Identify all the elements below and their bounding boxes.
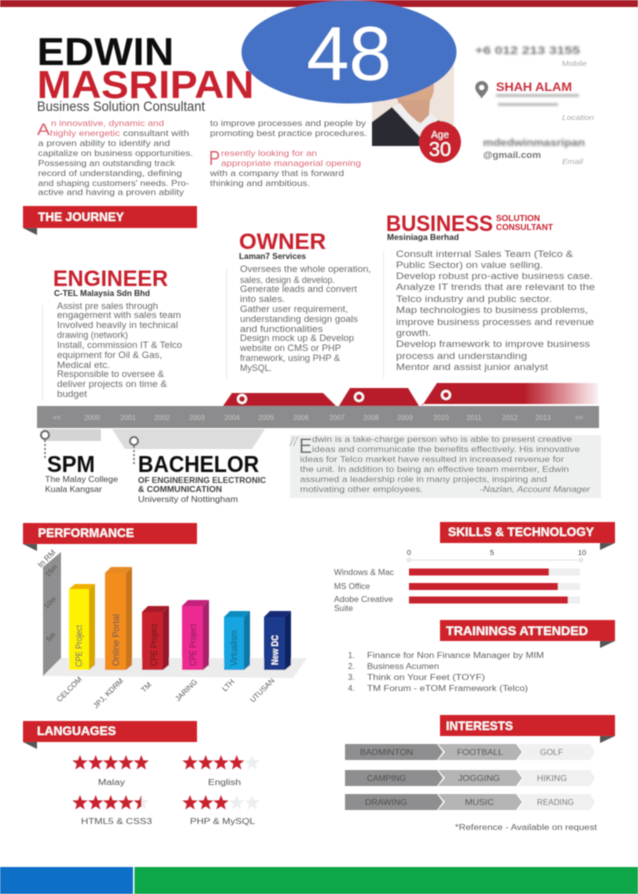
contact: location: SHAH ALAM [496, 80, 572, 94]
interests chevrons row 1: FOOTBALL [457, 747, 503, 757]
education: bachelor [112, 429, 266, 504]
job: owner: Generate leads and convert [240, 284, 358, 294]
age badge: 30 [429, 139, 451, 161]
testimonial quote: // [289, 434, 299, 449]
timeline bar: 2003 [189, 415, 205, 422]
timeline bar: 2004 [224, 415, 240, 422]
intro text column 1: record of understanding, defining [38, 168, 182, 178]
page number badge: 48 [307, 12, 391, 97]
trainings list: TM Forum - eTOM Framework (Telco) [367, 684, 528, 693]
job: business solution consultant: Mesiniaga Berhad [387, 232, 459, 242]
name heading: EDWIN [37, 31, 174, 74]
intro text column 1: and shaping customers' needs. Pro- [38, 178, 189, 188]
skills bar chart [334, 548, 586, 613]
job: business solution consultant: Analyze IT trends that are relevant to the [396, 282, 595, 292]
contact: mobile: Mobile [562, 59, 587, 68]
interests chevrons row 3 [345, 794, 595, 810]
chart category labels: LTH [220, 677, 236, 693]
job: engineer: Responsible to oversee & [57, 369, 164, 379]
testimonial quote [289, 434, 601, 498]
job: owner: framework, using PHP & [240, 353, 340, 363]
name heading [37, 31, 254, 114]
job: owner: MySQL. [240, 363, 272, 373]
timeline bar: 2005 [258, 415, 274, 422]
testimonial quote: motivating other employees. [300, 484, 423, 494]
skills bar chart: MS Office [334, 582, 371, 591]
job: engineer: Medical etc. [57, 360, 110, 370]
rating: malay: Malay [98, 778, 125, 787]
contact: location [496, 80, 594, 122]
age badge [419, 121, 461, 163]
testimonial quote: E [299, 435, 312, 458]
interests chevrons row 2 [345, 770, 595, 786]
interests chevrons row 1 [345, 744, 595, 760]
banner: the journey [23, 206, 197, 235]
chart floor [43, 658, 307, 678]
job: business solution consultant: Telco industry and public sector. [396, 294, 552, 304]
job: engineer: Involved heavily in technical [57, 320, 178, 330]
intro text column 1: Possessing an outstanding track [38, 158, 176, 168]
rating: php and mysql: PHP & MySQL [190, 817, 256, 826]
job: business solution consultant: BUSINESS [386, 211, 493, 236]
skills bar chart: Windows & Mac [334, 568, 394, 577]
testimonial quote: -Nazlan, Account Manager [480, 484, 591, 494]
contact: email: Email [562, 157, 583, 166]
rating: php and mysql [182, 795, 260, 826]
portrait photo [372, 55, 454, 146]
timeline bar: 2013 [535, 415, 551, 422]
banner: trainings attended: TRAININGS ATTENDED [446, 624, 588, 638]
career period markers [223, 383, 598, 406]
banner: interests: INTERESTS [446, 719, 513, 733]
bar: utusan: New DC [270, 635, 280, 665]
bar: celcom [69, 584, 95, 670]
rating: english: English [208, 778, 241, 787]
icon: location pin [475, 81, 488, 98]
trainings list: Finance for Non Finance Manager by MIM [367, 651, 544, 660]
intro text column 1: consultant with [123, 128, 189, 138]
chart axis [36, 548, 61, 676]
education: spm: Kuala Kangsar [45, 484, 102, 494]
intro text column 2 [209, 118, 367, 188]
skills bar chart: 5 [490, 548, 494, 557]
timeline bar: 2006 [293, 415, 309, 422]
job: business solution consultant: process and understanding [396, 351, 527, 361]
trainings list: 1. [348, 651, 355, 660]
interests chevrons row 1: GOLF [540, 747, 563, 757]
timeline bar [37, 406, 599, 428]
bar: lth [224, 611, 250, 670]
rating: english [182, 755, 260, 787]
bar: jaring [182, 600, 209, 670]
job: business solution consultant: CONSULTANT [496, 223, 553, 232]
contact: location: Location [562, 113, 594, 122]
banner: trainings attended [440, 620, 615, 648]
timeline bar: 2008 [363, 415, 379, 422]
job: engineer: engagement with sales team [57, 310, 181, 320]
job: business solution consultant: SOLUTION [496, 214, 540, 223]
job: owner: OWNER [239, 229, 326, 254]
job: engineer: deliver projects on time & [57, 379, 167, 389]
intro text column 1 [37, 118, 193, 197]
bar: jaring: CPE Project [188, 624, 198, 666]
intro text column 1: a proven ability to identify and [38, 138, 170, 148]
job: owner: into sales. [240, 294, 285, 304]
job: business solution consultant: Develop robust pro-active business case. [396, 271, 593, 281]
chart axis: 15m [44, 564, 59, 578]
banner: performance: PERFORMANCE [38, 526, 134, 540]
job: owner: Oversees the whole operation, [240, 264, 371, 274]
trainings list: Think on Your Feet (TOYF) [367, 673, 485, 682]
bar: tm [142, 606, 169, 670]
job: business solution consultant: Mentor and assist junior analyst [396, 362, 549, 372]
banner: skills and technology [440, 522, 615, 550]
education: spm: The Malay College [45, 474, 118, 484]
job: engineer: drawing (network) [57, 330, 128, 340]
testimonial quote: dwin is a take-charge person who is able to present creative [312, 434, 572, 444]
timeline bar: << [53, 415, 61, 422]
bar: lth: Virtualism [229, 630, 239, 666]
contact: email: mdedwinmasripan [483, 138, 585, 149]
skills bar chart: Adobe Creative [334, 595, 394, 604]
interests chevrons row 3: MUSIC [465, 797, 494, 807]
job: owner: Laman7 Services [239, 251, 306, 261]
bar: tm: CPE Project [149, 624, 159, 666]
contact: mobile [475, 45, 587, 68]
contact: mobile: +6 012 213 3155 [475, 45, 580, 57]
job: business solution consultant: Map technologies to business problems, [396, 305, 588, 315]
banner: languages [23, 721, 197, 749]
trainings list: 4. [348, 684, 355, 693]
page number badge [242, 0, 456, 104]
intro text column 1: capitalize on business opportunities. [38, 148, 193, 158]
testimonial quote: the unit. In addition to being an effective team member, Edwin [300, 464, 569, 474]
education: bachelor: University of Nottingham [138, 494, 238, 504]
skills bar chart: Suite [334, 604, 354, 613]
chart category labels: CELCOM [55, 675, 84, 704]
intro text column 1: highly energetic [50, 128, 121, 138]
job: owner: Design mock up & Develop [240, 333, 354, 343]
intro text column 1: active and having a proven ability [38, 187, 185, 197]
job: engineer: budget [57, 389, 88, 399]
age badge: Age [431, 130, 449, 141]
bar: jpj kdrm: Online Portal [111, 614, 121, 666]
trainings list: Business Acumen [367, 662, 439, 671]
job: business solution consultant: growth. [396, 328, 431, 338]
job: business solution consultant: Develop framework to improve business [396, 339, 591, 349]
trainings list [348, 651, 544, 693]
education: spm [41, 429, 118, 494]
job: engineer: C-TEL Malaysia Sdn Bhd [54, 288, 150, 298]
intro text column 2: promoting best practice procedures. [210, 128, 367, 138]
intro text column 2: appropriate managerial opening [221, 158, 361, 168]
chart category labels: JARING [173, 677, 199, 703]
chart category labels [55, 675, 276, 710]
chart axis: 5m [45, 631, 57, 643]
intro text column 2: thinking and ambitious. [210, 178, 310, 188]
interests chevrons row 3: DRAWING [365, 797, 407, 807]
interests chevrons row 2: HIKING [537, 773, 567, 783]
skills bar chart: 0 [407, 548, 411, 557]
chart axis: 10m [43, 596, 58, 610]
job: owner [226, 229, 371, 380]
rating: malay [72, 755, 149, 787]
intro text column 1: A [37, 120, 51, 139]
job: engineer: Install, commission IT & Telco [57, 340, 182, 350]
banner: languages: LANGUAGES [37, 724, 116, 738]
bar chart: performance [36, 548, 307, 710]
intro text column 2: with a company that is forward [209, 168, 344, 178]
contact: email [483, 138, 585, 166]
name heading: Business Solution Consultant [37, 98, 205, 114]
banner: performance [23, 523, 197, 551]
timeline bar: 2010 [433, 415, 449, 422]
bar: utusan [264, 611, 291, 670]
education: bachelor: BACHELOR [138, 451, 259, 477]
job: engineer [42, 266, 182, 401]
top red bar [0, 0, 638, 7]
banner: interests [440, 715, 615, 743]
testimonial quote: ideas for Telco market have resulted in increased revenue for [300, 454, 564, 464]
intro text column 2: to improve processes and people by [210, 118, 367, 128]
timeline bar: 2007 [329, 415, 345, 422]
chart axis: In RM [36, 548, 58, 569]
job: owner: understanding design goals [240, 314, 359, 324]
interests chevrons row 2: JOGGING [458, 773, 500, 783]
job: business solution consultant: Public Sector) on value selling. [396, 260, 543, 270]
footer bar [0, 867, 638, 894]
interests chevrons row 2: CAMPING [367, 773, 406, 783]
job: engineer: ENGINEER [53, 266, 168, 291]
interests chevrons row 1: BADMINTON [360, 747, 413, 757]
reference note: *Reference - Available on request [455, 823, 598, 832]
rating: html5 and css3: HTML5 & CSS3 [81, 817, 153, 826]
education: bachelor: OF ENGINEERING ELECTRONIC [138, 475, 266, 485]
intro text column 1: n innovative, dynamic and [51, 118, 164, 128]
job: owner: website on CMS or PHP [239, 343, 341, 353]
job: business solution consultant: improve business processes and revenue [396, 317, 594, 327]
job: owner: sales, design & develop. [240, 275, 335, 285]
chart category labels: TM [139, 680, 153, 694]
trainings list: 2. [348, 662, 355, 671]
timeline bar: 2011 [466, 415, 482, 422]
banner: the journey: THE JOURNEY [38, 210, 124, 224]
job: engineer: equipment for Oil & Gas, [57, 350, 162, 360]
contact: email: @gmail.com [483, 150, 541, 161]
name heading: MASRIPAN [37, 64, 254, 107]
job: engineer: Assist pre sales through [57, 301, 158, 311]
job: owner: Gather user requirement, [240, 304, 348, 314]
testimonial quote: ideas and communicate the benefits effectively. His innovative [312, 444, 580, 454]
education: bachelor: & COMMUNICATION [138, 484, 222, 494]
testimonial quote: assumed a leadership role in many projects, inspiring and [300, 474, 547, 484]
intro text column 2: P [209, 148, 220, 170]
banner: skills and technology: SKILLS & TECHNOLOGY [448, 525, 594, 539]
skills bar chart: 10 [578, 548, 586, 557]
rating: html5 and css3 [72, 795, 153, 826]
job: business solution consultant: Consult internal Sales Team (Telco & [396, 249, 573, 259]
intro text column 2: resently looking for an [221, 148, 317, 158]
trainings list: 3. [348, 673, 355, 682]
bar: jpj kdrm [105, 567, 132, 670]
timeline bar: 2012 [502, 415, 518, 422]
timeline bar: 2001 [120, 415, 136, 422]
job: business solution consultant [383, 211, 595, 378]
timeline bar: 2000 [84, 415, 100, 422]
timeline bar: 2002 [154, 415, 170, 422]
timeline bar: 2009 [397, 415, 413, 422]
bar: celcom: CPE Project [74, 625, 84, 667]
timeline bar: >> [575, 415, 583, 422]
chart category labels: JPJ, KDRM [91, 676, 125, 710]
chart category labels: UTUSAN [248, 676, 276, 704]
education: spm: SPM [47, 451, 95, 477]
interests chevrons row 3: READING [537, 797, 574, 807]
job: owner: and functionalities [240, 324, 324, 334]
